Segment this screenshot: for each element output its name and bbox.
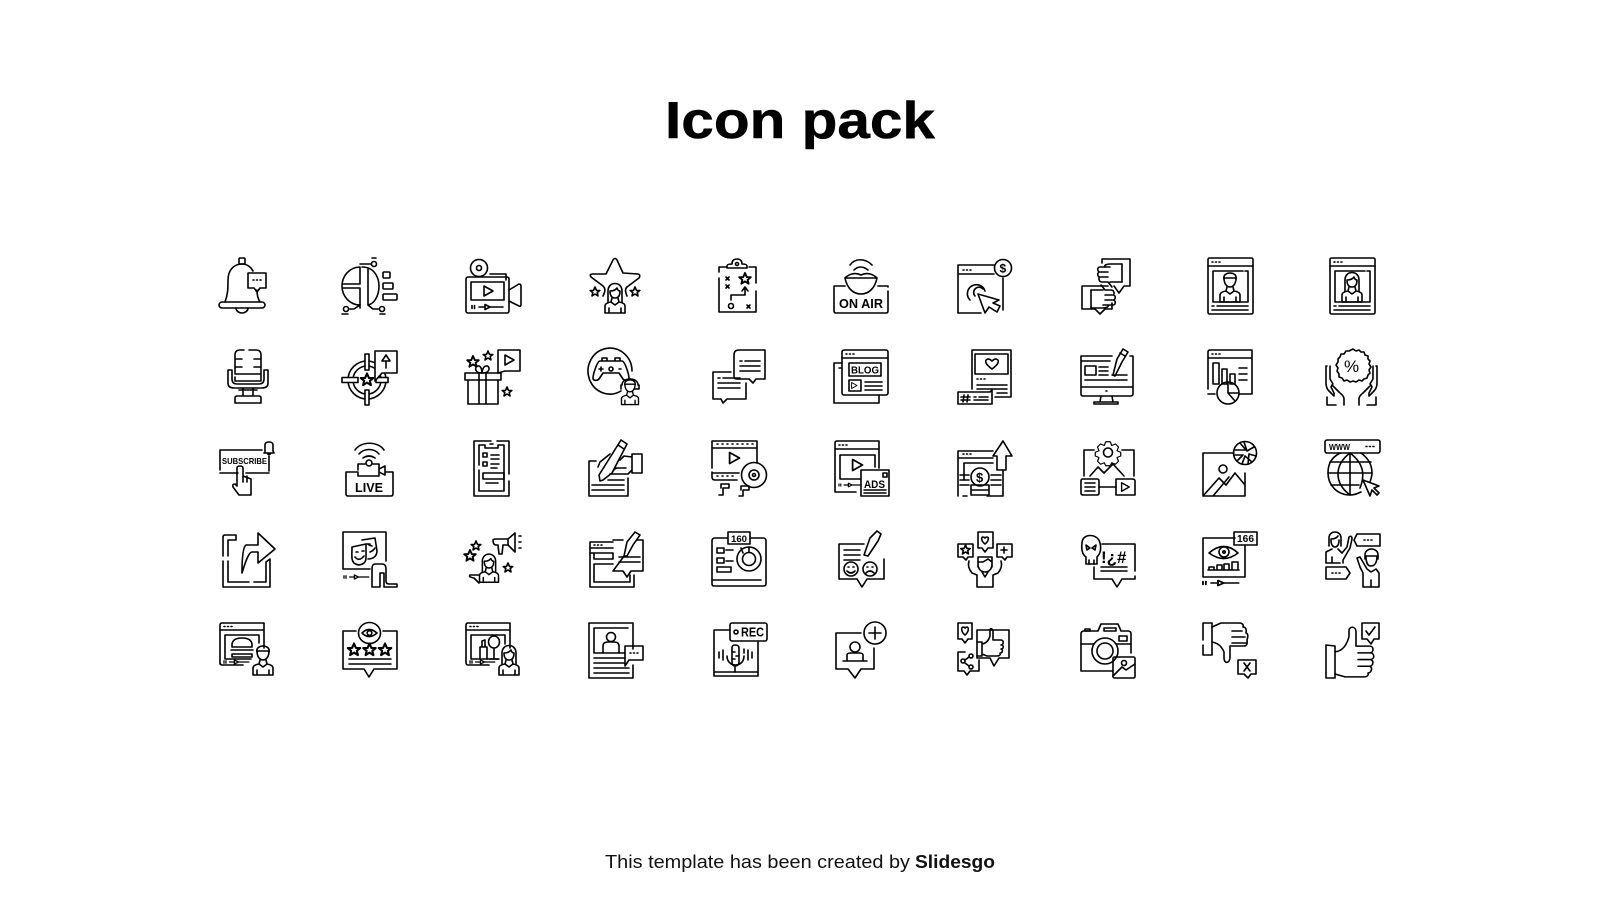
icon: money window with arrow: [958, 441, 1012, 496]
icon: window with note and pencil: [590, 532, 643, 587]
icon: gear mountains media: [1081, 442, 1135, 495]
icon: smartphone list: [474, 441, 509, 496]
icon: eye rating bubble: [343, 622, 397, 677]
footer credit: This template has been created by: [605, 851, 911, 872]
icon: person with reaction bubbles: [958, 532, 1012, 587]
icon: thumbs in bubbles: [1082, 259, 1130, 314]
icon: star with woman: [590, 258, 640, 313]
icon: woman with megaphone and stars: [464, 533, 521, 583]
icon: chat bubbles: [713, 350, 765, 403]
icon: video ads window: ADS: [864, 479, 885, 491]
icon: analytics window with pie: [1208, 350, 1252, 404]
icon: video ads window: [835, 441, 889, 496]
icon: gamepad with gamer: [588, 348, 639, 405]
icon: theatre masks video: [343, 532, 397, 587]
icon: globe with www bar: [1325, 440, 1380, 496]
icon: blog window: [834, 350, 888, 403]
icon: film with disc and notes: [712, 441, 766, 496]
icon: hand writing with pencil: [589, 440, 642, 496]
icon: hands with percent badge: [1326, 349, 1377, 405]
icon: monitor with pencil: [1081, 349, 1133, 404]
icon: on air lips: [834, 260, 888, 313]
footer credit: Slidesgo: [915, 851, 995, 872]
icon: studio microphone: [228, 350, 268, 403]
icon: heart article hashtag: [958, 350, 1011, 404]
icon: thumb down with x bubble: [1203, 623, 1256, 678]
icon: pie chart with data nodes: [342, 258, 397, 314]
icon: live camera: [346, 443, 393, 496]
icon: paid click window: [958, 260, 1012, 313]
icon: paid click window: $: [1000, 262, 1006, 276]
icon: on air lips: ON AIR: [839, 296, 884, 311]
icon: like heart and share bubbles: [958, 623, 1009, 675]
icon: two people chatting: [1326, 532, 1380, 587]
icon: eye with analytics 166: 166: [1237, 534, 1254, 545]
icon: bell with chat bubble: [219, 258, 266, 313]
icon: skull with censored bubble: !¿#: [1101, 548, 1127, 567]
icon: article with person and chat: [589, 623, 643, 678]
icon: live camera: LIVE: [355, 480, 383, 495]
icon: camera with picture: [1081, 624, 1135, 678]
title: Icon pack: [665, 92, 935, 150]
icon: eye with analytics 166: [1203, 532, 1257, 586]
icon: hands with percent badge: %: [1344, 357, 1359, 376]
icon: recording microphone: [714, 623, 767, 676]
icon: 160 screen with chart: 160: [731, 534, 747, 545]
icon: 160 screen with chart: [712, 532, 766, 586]
icon: recording microphone: REC: [741, 624, 765, 640]
icon: subscribe button with bell: SUBSCRIBE: [222, 456, 267, 466]
icon: skull with censored bubble: [1082, 536, 1135, 587]
icon: thumb up with check bubble: [1326, 623, 1379, 678]
icon: gift with stars and video bubble: [465, 350, 520, 404]
icon: picture with aperture: [1203, 442, 1256, 496]
icon: feedback bubble with pencil: [839, 531, 884, 587]
icon: clipboard with strategy: [719, 259, 756, 312]
icon: profile page woman: [1330, 258, 1375, 314]
icon: video window with burger and man: [220, 623, 273, 675]
icon: money window with arrow: $: [976, 470, 984, 485]
icon: share arrow: [223, 533, 275, 587]
icon: add person bubble: [836, 622, 886, 678]
icon: profile page man: [1208, 258, 1253, 314]
icon: globe with www bar: WWW: [1329, 442, 1351, 452]
icon: blog window: BLOG: [851, 366, 879, 376]
icon: subscribe button with bell: [220, 442, 274, 495]
icon: cosmetics video window and woman: [466, 623, 519, 675]
icon: video camera with reel: [466, 260, 521, 313]
icon: target with star: [342, 351, 397, 405]
